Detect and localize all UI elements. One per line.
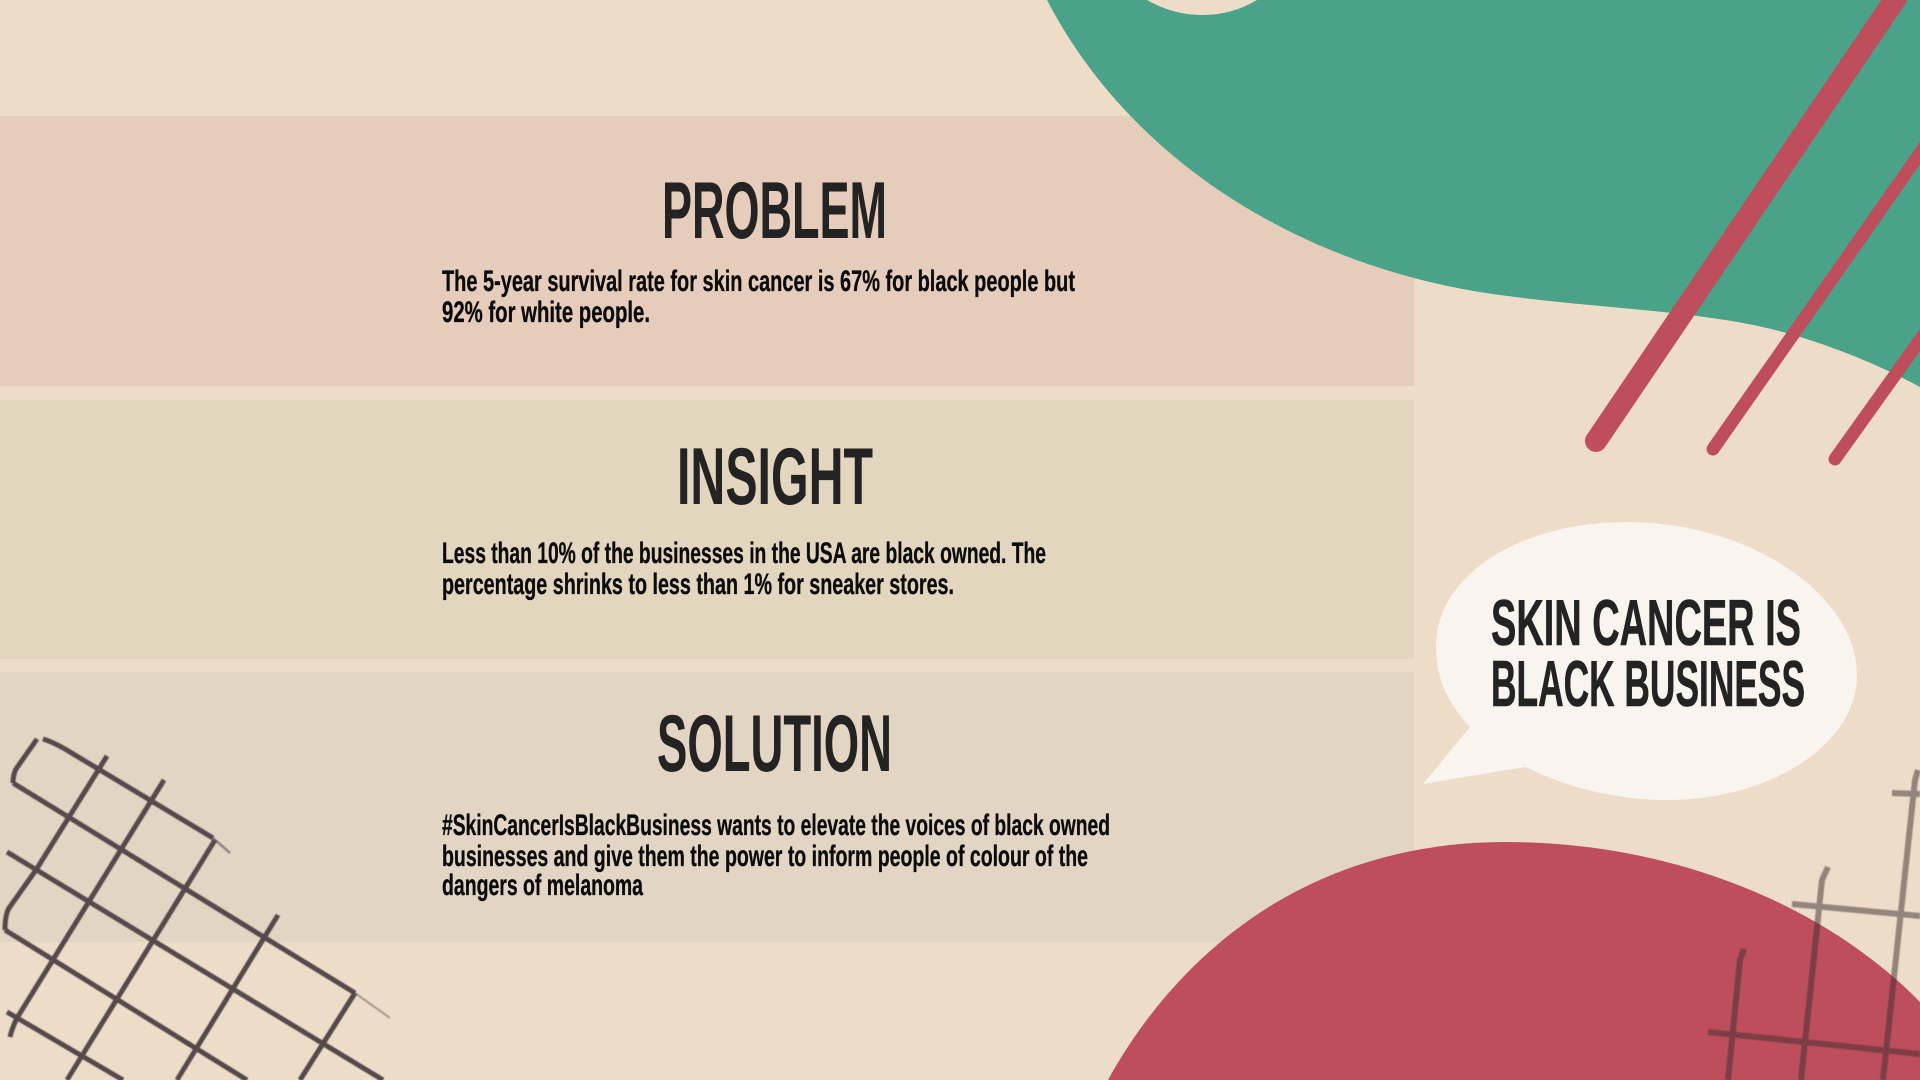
red blob shape [1108, 842, 1920, 1080]
text block: insight description: percentage shrinks to less than 1% for sneaker stores. [442, 568, 954, 601]
red diagonal stripes [1596, 0, 1920, 459]
decorative grid: bottom left [5, 739, 390, 1080]
text block: problem description: The 5-year survival rate for skin cancer is 67% for black people but [442, 265, 1075, 298]
text block: insight description: Less than 10% of the businesses in the USA are black owned. The [442, 537, 1046, 570]
panel: insight [0, 400, 1414, 659]
panel: problem [0, 116, 1414, 386]
green blob shape [1047, 0, 1920, 387]
text block: insight description [442, 537, 1046, 601]
text block: solution description [442, 809, 1110, 902]
heading: insight: INSIGHT [677, 432, 873, 522]
text block: solution description: dangers of melanoma [442, 869, 643, 902]
text block: problem description [442, 265, 1075, 329]
decorative grid: bottom right [1708, 770, 1920, 1080]
panel: solution [0, 672, 1414, 942]
text block: solution description: #SkinCancerIsBlackBusiness wants to elevate the voices of black owned [442, 809, 1110, 842]
speech bubble headline [1491, 586, 1805, 720]
text block: solution description: businesses and give them the power to inform people of colour of the [442, 840, 1088, 873]
heading: solution: SOLUTION [657, 699, 892, 789]
heading: problem: PROBLEM [662, 166, 887, 256]
text block: problem description: 92% for white people. [442, 296, 650, 329]
callout: speech bubble [1423, 522, 1857, 800]
